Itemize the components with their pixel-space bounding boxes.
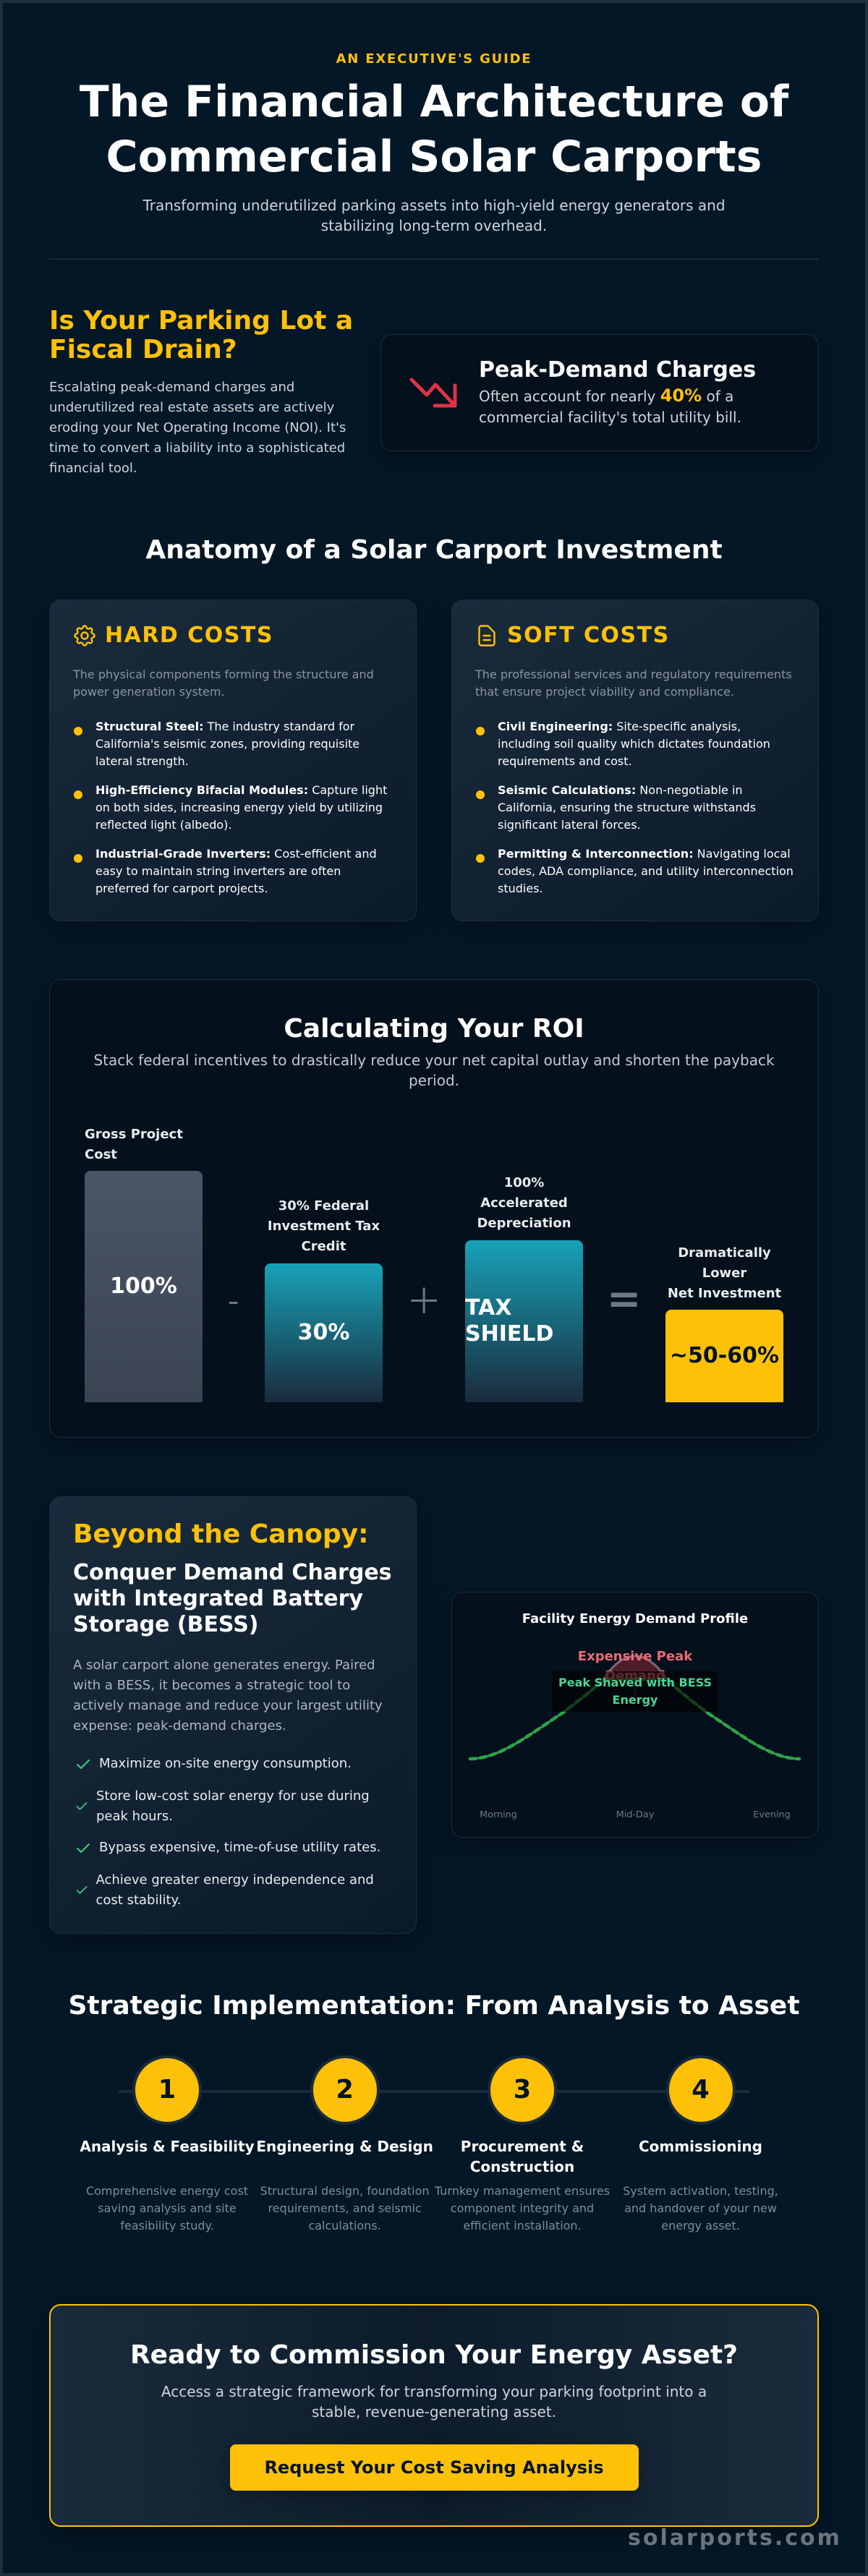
- heading: Calculating Your ROI: [284, 1014, 584, 1044]
- CTA heading: Ready to Commission Your Energy Asset?: [130, 2340, 738, 2370]
- peak label: Expensive Peak: [578, 1649, 693, 1664]
- list item: structural steel: [74, 720, 359, 768]
- label: federal tax credit: [268, 1198, 380, 1254]
- list item: structural steel: lateral strength.: [95, 754, 189, 768]
- step 3 description: efficient installation.: [463, 2219, 582, 2232]
- bar chart: ROI stack: [85, 1127, 783, 1402]
- list item: structural steel: Structural Steel: The industry standard for: [95, 720, 354, 733]
- step 3 title: Construction: [470, 2158, 574, 2175]
- step 3 number: [488, 2055, 557, 2125]
- body text: [49, 380, 346, 476]
- bar: gross cost: [85, 1171, 203, 1402]
- label: accelerated depreciation: [477, 1175, 571, 1231]
- kicker: AN EXECUTIVE'S GUIDE: [336, 51, 532, 67]
- step 1 description: Comprehensive energy cost: [86, 2184, 248, 2198]
- step 4 description: System activation, testing,: [623, 2184, 778, 2198]
- label: accelerated depreciation: Depreciation: [477, 1216, 571, 1231]
- label: net investment: Lower: [702, 1266, 746, 1281]
- callout: peak demand charges: [380, 334, 819, 451]
- panel heading: HARD COSTS: [105, 623, 273, 648]
- heading: Is Your Parking Lot a: [49, 306, 353, 336]
- list item: bifacial modules: reflected light (albedo).: [95, 818, 231, 832]
- check item: independence: [77, 1872, 374, 1908]
- description: expense: peak-demand charges.: [73, 1718, 286, 1733]
- panel description: The physical components forming the structure and: [73, 668, 374, 681]
- subtitle: [93, 1052, 775, 1089]
- operator: plus: +: [406, 1274, 442, 1325]
- label: gross project cost: [85, 1127, 183, 1162]
- list item: bifacial modules: High-Efficiency Bifacial Modules: Capture light: [95, 783, 387, 797]
- CTA text: [161, 2383, 707, 2421]
- list item: inverters: easy to maintain string inverters are often: [95, 864, 341, 878]
- list item: bifacial modules: [74, 783, 388, 832]
- bar: tax shield: TAX: [465, 1295, 511, 1321]
- subheading: Conquer Demand Charges: [73, 1560, 392, 1585]
- CTA text: stable, revenue-generating asset.: [312, 2403, 556, 2421]
- panel: energy demand chart: [451, 1592, 819, 1838]
- subtitle: Stack federal incentives to drastically reduce your net capital outlay and shorten the payback: [93, 1052, 775, 1069]
- subtitle: stabilizing long-term overhead.: [321, 217, 547, 234]
- panel description: [475, 668, 792, 699]
- panel: calculating your ROI: [49, 979, 819, 1438]
- axis label: mid-day: Mid-Day: [616, 1809, 655, 1820]
- operator: equals: =: [607, 1275, 642, 1323]
- step 1 description: feasibility study.: [120, 2219, 214, 2232]
- label: federal tax credit: Credit: [302, 1239, 346, 1254]
- check item: bypass: Bypass expensive, time-of-use utility rates.: [99, 1840, 380, 1855]
- label: gross project cost: Cost: [85, 1147, 117, 1162]
- step 3 title: [461, 2138, 584, 2175]
- peak marker: [634, 1687, 636, 1699]
- bar: net investment: ~50-60%: [670, 1343, 779, 1368]
- check item: independence: cost stability.: [95, 1893, 181, 1908]
- description: with a BESS, it becomes a strategic tool to: [73, 1678, 350, 1693]
- panel: hard costs: [49, 600, 417, 921]
- panel: call to action: [49, 2304, 819, 2527]
- list item: inverters: [74, 847, 377, 895]
- check item: maximize: Maximize on-site energy consumption.: [99, 1756, 352, 1771]
- step 4 description: [623, 2184, 778, 2232]
- list item: civil engineering: Civil Engineering: Site-specific analysis,: [498, 720, 741, 733]
- timeline: implementation steps: [119, 2090, 749, 2093]
- step 4 number: 4: [692, 2075, 710, 2104]
- panel description: The professional services and regulatory requirements: [475, 668, 792, 681]
- callout text: commercial facility's total utility bill.: [479, 409, 741, 426]
- timeline connector: [119, 2090, 749, 2093]
- bar: federal tax credit: [265, 1263, 383, 1402]
- watermark: solarports.com: [628, 2525, 842, 2551]
- shaved label box: [553, 1671, 718, 1712]
- label: federal tax credit: 30% Federal: [278, 1198, 369, 1214]
- body text: eroding your Net Operating Income (NOI). It's: [49, 420, 346, 435]
- subheading: [73, 1560, 392, 1637]
- shaved curve: [470, 1679, 799, 1759]
- description: actively manage and reduce your largest utility: [73, 1698, 383, 1713]
- chart: demand curve: [469, 1649, 801, 1820]
- title: Commercial Solar Carports: [106, 132, 762, 182]
- step 2 description: [260, 2184, 430, 2232]
- list item: permitting: studies.: [498, 882, 543, 895]
- callout text: [479, 385, 741, 426]
- title: [80, 77, 789, 182]
- list item: bifacial modules: on both sides, increasing energy yield by utilizing: [95, 801, 383, 814]
- subtitle: [142, 197, 726, 234]
- label: accelerated depreciation: 100%: [504, 1175, 544, 1190]
- body text: financial tool.: [49, 461, 137, 476]
- list item: seismic calculations: Seismic Calculations: Non-negotiable in: [498, 783, 743, 797]
- step 3 title: Procurement &: [461, 2138, 584, 2155]
- icon: document: [478, 625, 495, 647]
- description: [73, 1658, 383, 1733]
- subtitle: Transforming underutilized parking assets into high-yield energy generators and: [142, 197, 726, 214]
- heading: [49, 306, 353, 364]
- heading: Beyond the Canopy:: [73, 1519, 368, 1549]
- panel: soft costs: [451, 600, 819, 921]
- list item: permitting: [476, 847, 793, 895]
- bar: gross cost: 100%: [110, 1274, 177, 1299]
- body text: time to convert a liability into a sophisticated: [49, 440, 345, 456]
- step 3 number: 3: [514, 2075, 531, 2104]
- step 3 description: [434, 2184, 610, 2232]
- divider: [49, 258, 819, 260]
- list item: seismic calculations: California, ensuring the structure withstands: [498, 801, 756, 814]
- panel heading: SOFT COSTS: [507, 623, 670, 648]
- check item: independence: Achieve greater energy independence and: [95, 1872, 374, 1888]
- label: net investment: [668, 1245, 781, 1301]
- list item: civil engineering: including soil quality which dictates foundation: [498, 737, 770, 751]
- operator: minus: -: [227, 1281, 239, 1321]
- check item: store: [77, 1788, 370, 1824]
- label: accelerated depreciation: Accelerated: [480, 1195, 568, 1211]
- step 2 description: calculations.: [308, 2219, 381, 2232]
- list item: inverters: preferred for carport projects.: [95, 882, 268, 895]
- axis label: evening: Evening: [753, 1809, 791, 1820]
- panel: beyond the canopy: [49, 1496, 417, 1934]
- step 3 description: component integrity and: [451, 2201, 594, 2215]
- step 2 description: Structural design, foundation: [260, 2184, 430, 2198]
- CTA button: Request Your Cost Saving Analysis: [264, 2457, 604, 2478]
- title: The Financial Architecture of: [80, 77, 788, 127]
- step 1 number: [132, 2055, 202, 2125]
- heading: Fiscal Drain?: [49, 335, 237, 364]
- bar: net investment: [665, 1310, 783, 1402]
- label: net investment: Net Investment: [668, 1286, 781, 1301]
- list item: permitting: codes, ADA compliance, and utility interconnection: [498, 864, 793, 878]
- list item: civil engineering: [476, 720, 770, 768]
- axis label: morning: Morning: [480, 1809, 517, 1820]
- step 4 description: energy asset.: [661, 2219, 740, 2232]
- peak area: [604, 1656, 666, 1679]
- subheading: with Integrated Battery: [73, 1586, 363, 1611]
- step 4 number: [665, 2055, 735, 2125]
- body text: underutilized real estate assets are actively: [49, 400, 334, 415]
- list item: seismic calculations: significant lateral forces.: [498, 818, 641, 832]
- step 1 number: 1: [158, 2075, 176, 2104]
- demand curve: [470, 1656, 799, 1759]
- shaved label: Peak Shaved with BESS: [558, 1676, 712, 1689]
- step 2 description: requirements, and seismic: [268, 2201, 422, 2215]
- panel description: power generation system.: [73, 685, 225, 699]
- step 1 description: saving analysis and site: [98, 2201, 237, 2215]
- callout text: Often account for nearly 40% of a: [479, 385, 733, 406]
- label: federal tax credit: Investment Tax: [268, 1219, 380, 1234]
- panel description: [72, 668, 374, 699]
- bar: tax shield: SHIELD: [465, 1321, 553, 1347]
- heading: strategic implementation: Strategic Implementation: From Analysis to Asset: [68, 1991, 800, 2021]
- step 2 number: 2: [336, 2075, 354, 2104]
- panel description: that ensure project viability and compliance.: [475, 685, 734, 699]
- step 4 title: Commissioning: [639, 2138, 762, 2155]
- list item: civil engineering: requirements and cost.: [498, 754, 632, 768]
- CTA text: Access a strategic framework for transforming your parking footprint into a: [161, 2383, 707, 2400]
- step 4 description: and handover of your new: [624, 2201, 777, 2215]
- label: gross project cost: Gross Project: [85, 1127, 183, 1142]
- heading: anatomy: Anatomy of a Solar Carport Investment: [145, 535, 723, 565]
- subheading: Storage (BESS): [73, 1612, 259, 1637]
- chart title: Facility Energy Demand Profile: [522, 1611, 748, 1626]
- list item: inverters: Industrial-Grade Inverters: Cost-efficient and: [95, 847, 377, 861]
- icon: gear: [74, 625, 95, 647]
- list item: permitting: Permitting & Interconnection: Navigating local: [498, 847, 791, 861]
- label: net investment: Dramatically: [678, 1245, 771, 1261]
- step 3 description: Turnkey management ensures: [435, 2184, 610, 2198]
- bar: federal tax credit: 30%: [298, 1320, 349, 1345]
- header: [49, 51, 819, 260]
- list item: structural steel: California's seismic zones, providing requisite: [95, 737, 359, 751]
- step 1 description: [86, 2184, 248, 2232]
- check item: store: peak hours.: [96, 1809, 173, 1824]
- step 2 number: [310, 2055, 380, 2125]
- subtitle: period.: [409, 1072, 459, 1089]
- step 1 title: Analysis & Feasibility: [80, 2138, 255, 2155]
- check item: store: Store low-cost solar energy for use during: [96, 1788, 370, 1804]
- body text: Escalating peak-demand charges and: [49, 380, 294, 395]
- chart: demand curve: Demand: [605, 1668, 665, 1684]
- icon: trending down arrow: [409, 378, 457, 408]
- description: A solar carport alone generates energy. Paired: [73, 1658, 375, 1673]
- CTA button: [230, 2444, 638, 2491]
- bar: tax shield: [465, 1240, 583, 1402]
- section: fiscal drain: [49, 306, 353, 476]
- step 2 title: Engineering & Design: [256, 2138, 433, 2155]
- callout heading: Peak-Demand Charges: [479, 357, 756, 383]
- chart: demand curve: Energy: [613, 1693, 658, 1707]
- list item: seismic calculations: [476, 783, 756, 832]
